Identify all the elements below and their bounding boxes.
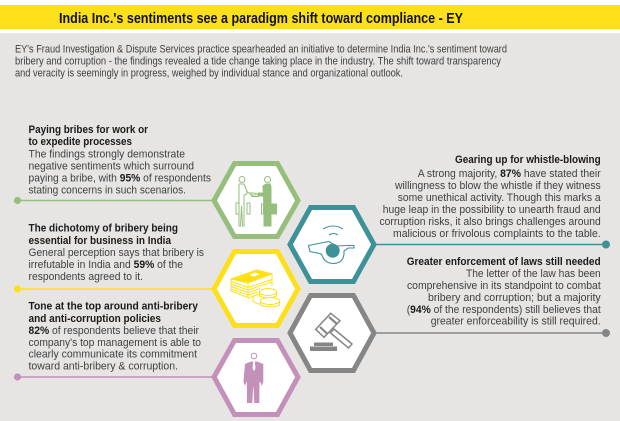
panel: paying bribes: paying a bribe, with 95% of respondents	[28, 173, 212, 185]
title banner: India Inc.'s sentiments see a paradigm shift toward compliance - EY	[59, 10, 463, 27]
panel: whistle-blowing: A strong majority, 87% have stated their	[418, 168, 601, 180]
panel: dichotomy of bribery: irrefutable in India and 59% of the	[28, 259, 183, 271]
intro text: bribery and corruption - the findings revealed a tide change taking place in the industry. The shift toward transparency	[15, 56, 501, 68]
connector: gray	[375, 329, 610, 337]
panel: dichotomy of bribery	[28, 223, 205, 283]
intro text: EY's Fraud Investigation & Dispute Services practice spearheaded an initiative to determine India Inc.'s sentiment toward	[15, 44, 507, 56]
panel: paying bribes	[28, 124, 212, 197]
connector: yellow	[14, 285, 213, 293]
connector: teal	[375, 240, 610, 248]
panel: whistle-blowing: corruption risks, it also brings challenges around	[380, 216, 601, 228]
icon: handshake	[236, 176, 276, 226]
connector: green	[14, 197, 213, 204]
connector: purple	[14, 373, 213, 381]
icon: businessman	[243, 353, 263, 403]
panel: tone at the top: Tone at the top around anti-bribery	[28, 301, 198, 313]
panel: whistle-blowing	[380, 154, 601, 240]
panel: dichotomy of bribery: respondents agreed to it.	[28, 271, 143, 283]
panel: whistle-blowing: Gearing up for whistle-blowing	[455, 154, 601, 166]
panel: paying bribes: Paying bribes for work or	[28, 124, 149, 136]
panel: enforcement of laws: (94% of the respondents) still believes that	[407, 304, 601, 316]
panel: paying bribes: negative sentiments which surround	[28, 161, 194, 173]
hexagon: yellow money	[214, 252, 298, 326]
panel: paying bribes: to expedite processes	[28, 136, 132, 148]
panel: dichotomy of bribery: essential for business in India	[28, 235, 172, 247]
panel: whistle-blowing: some unethical activity. Though this marks a	[398, 192, 601, 204]
panel: enforcement of laws: The letter of the law has been	[466, 268, 601, 280]
title banner	[0, 5, 620, 29]
intro text: and veracity is seemingly in progress, weighed by individual stance and organizational outlook.	[15, 68, 403, 80]
panel: paying bribes: The findings strongly demonstrate	[28, 149, 185, 161]
panel: enforcement of laws	[407, 256, 601, 328]
panel: whistle-blowing: huge leap in the possibility to unearth fraud and	[383, 204, 601, 216]
icon: whistle	[308, 226, 354, 264]
hexagon: gray gavel	[290, 296, 374, 370]
panel: tone at the top: 82% of respondents believe that their	[28, 325, 199, 337]
panel: enforcement of laws: comprehensive in its standpoint to combat	[407, 280, 601, 292]
panel: tone at the top: and anti-corruption policies	[28, 313, 161, 325]
panel: tone at the top	[28, 301, 201, 373]
panel: tone at the top: company's top management is able to	[28, 337, 201, 349]
panel: dichotomy of bribery: General perception says that bribery is	[28, 247, 205, 259]
panel: paying bribes: stating concerns in such scenarios.	[28, 185, 186, 197]
hexagon: purple businessman	[214, 340, 298, 414]
hexagon: teal whistle	[290, 208, 374, 282]
intro text	[15, 44, 507, 80]
panel: whistle-blowing: willingness to blow the whistle if they witness	[394, 180, 601, 192]
panel: whistle-blowing: malicious or frivolous complaints to the table.	[393, 228, 601, 240]
hexagon: green handshake	[214, 164, 298, 236]
panel: tone at the top: clearly communicate its commitment	[28, 349, 197, 361]
icon: money stack and coins	[231, 270, 280, 307]
panel: dichotomy of bribery: The dichotomy of bribery being	[28, 223, 178, 235]
icon: gavel	[310, 313, 352, 351]
panel: enforcement of laws: greater enforceability is still required.	[431, 316, 601, 328]
panel: enforcement of laws: bribery and corruption; but a majority	[428, 292, 601, 304]
panel: enforcement of laws: Greater enforcement of laws still needed	[407, 256, 601, 268]
panel: tone at the top: toward anti-bribery & corruption.	[28, 361, 178, 373]
